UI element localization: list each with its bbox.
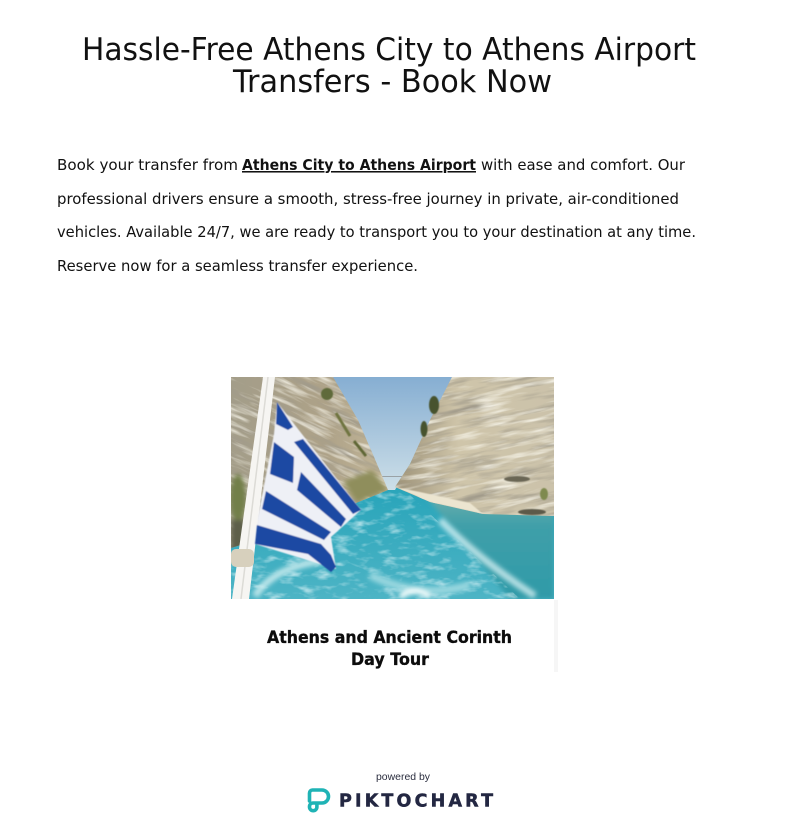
intro paragraph: vehicles. Available 24/7, we are ready to transport you to your destination at any time. xyxy=(57,223,696,241)
wake foam xyxy=(231,492,518,599)
calm water on the right xyxy=(425,495,554,599)
tour card xyxy=(231,377,558,672)
right cliff xyxy=(395,377,554,516)
title xyxy=(82,32,696,100)
trees xyxy=(420,396,439,437)
intro paragraph xyxy=(57,156,696,275)
intro paragraph: Book your transfer from xyxy=(57,156,238,174)
wordmark: PIKTOCHART xyxy=(339,792,493,812)
left cliff xyxy=(231,377,388,548)
rope xyxy=(231,549,254,567)
powered by label: powered by xyxy=(376,771,431,783)
card edge xyxy=(554,600,558,672)
tour caption xyxy=(267,628,512,670)
intro paragraph: professional drivers ensure a smooth, stress-free journey in private, air-conditioned xyxy=(57,190,679,208)
intro paragraph: with ease and comfort. Our xyxy=(481,156,686,174)
tour caption: Day Tour xyxy=(351,650,430,670)
intro paragraph: Athens City to Athens Airport xyxy=(242,156,477,174)
pole xyxy=(232,377,275,599)
intro paragraph: Reserve now for a seamless transfer experience. xyxy=(57,257,418,275)
photo: Corinth Canal with Greek flag xyxy=(231,377,554,599)
title: Hassle-Free Athens City to Athens Airport xyxy=(82,32,696,68)
title: Transfers - Book Now xyxy=(232,64,552,100)
icon: Piktochart mark xyxy=(310,790,328,811)
tour caption: Athens and Ancient Corinth xyxy=(267,628,512,648)
powered by Piktochart logo xyxy=(310,771,493,812)
flag xyxy=(255,402,361,572)
